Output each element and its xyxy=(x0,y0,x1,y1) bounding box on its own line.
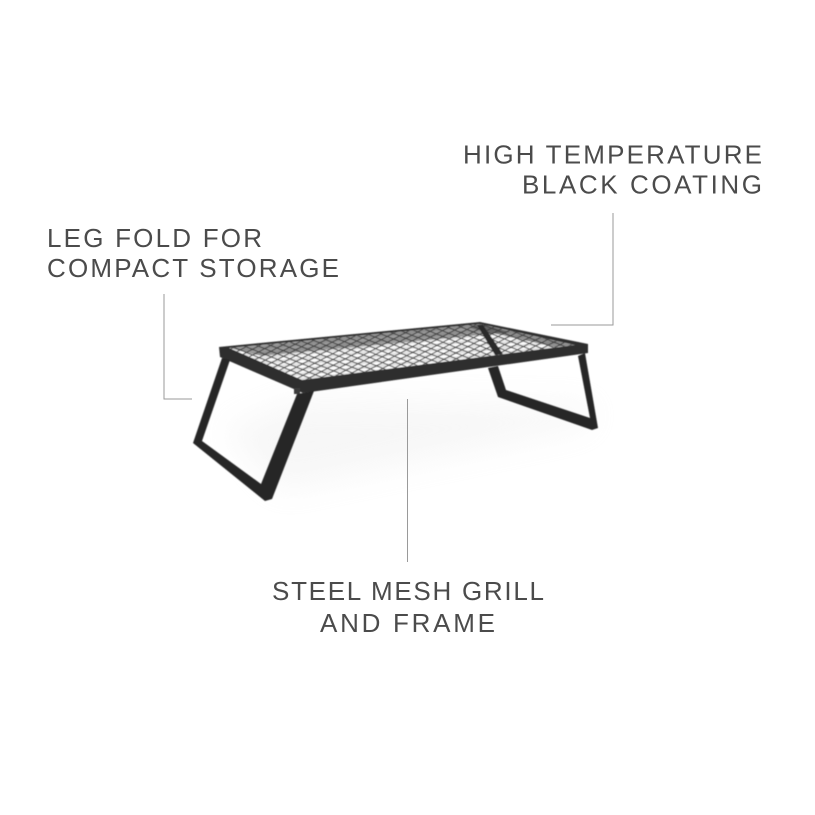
back right leg xyxy=(488,353,598,430)
grill table xyxy=(193,322,598,501)
top frame xyxy=(219,322,588,393)
label: steel mesh grill and frame xyxy=(272,576,544,638)
centre support bar xyxy=(477,325,503,355)
leader line: mesh xyxy=(406,399,408,562)
front left leg xyxy=(193,358,314,501)
label: leg fold for compact storage xyxy=(47,223,339,283)
label: steel mesh grill and frame: STEEL MESH GRILL xyxy=(272,576,544,606)
label: steel mesh grill and frame: AND FRAME xyxy=(320,608,495,638)
label: leg fold for compact storage: LEG FOLD FOR xyxy=(47,223,262,253)
leader line: coating xyxy=(551,213,613,325)
label: high temperature black coating: HIGH TEMPERATURE xyxy=(463,140,762,170)
leader line: leg fold xyxy=(164,294,192,399)
soft ground shadow xyxy=(225,400,590,490)
hinge xyxy=(294,388,300,394)
upper dark mesh band xyxy=(229,324,510,356)
mesh grill surface xyxy=(229,324,575,380)
label: high temperature black coating: BLACK COATING xyxy=(522,170,762,200)
label: high temperature black coating xyxy=(463,140,762,200)
label: leg fold for compact storage: COMPACT STORAGE xyxy=(47,253,339,283)
